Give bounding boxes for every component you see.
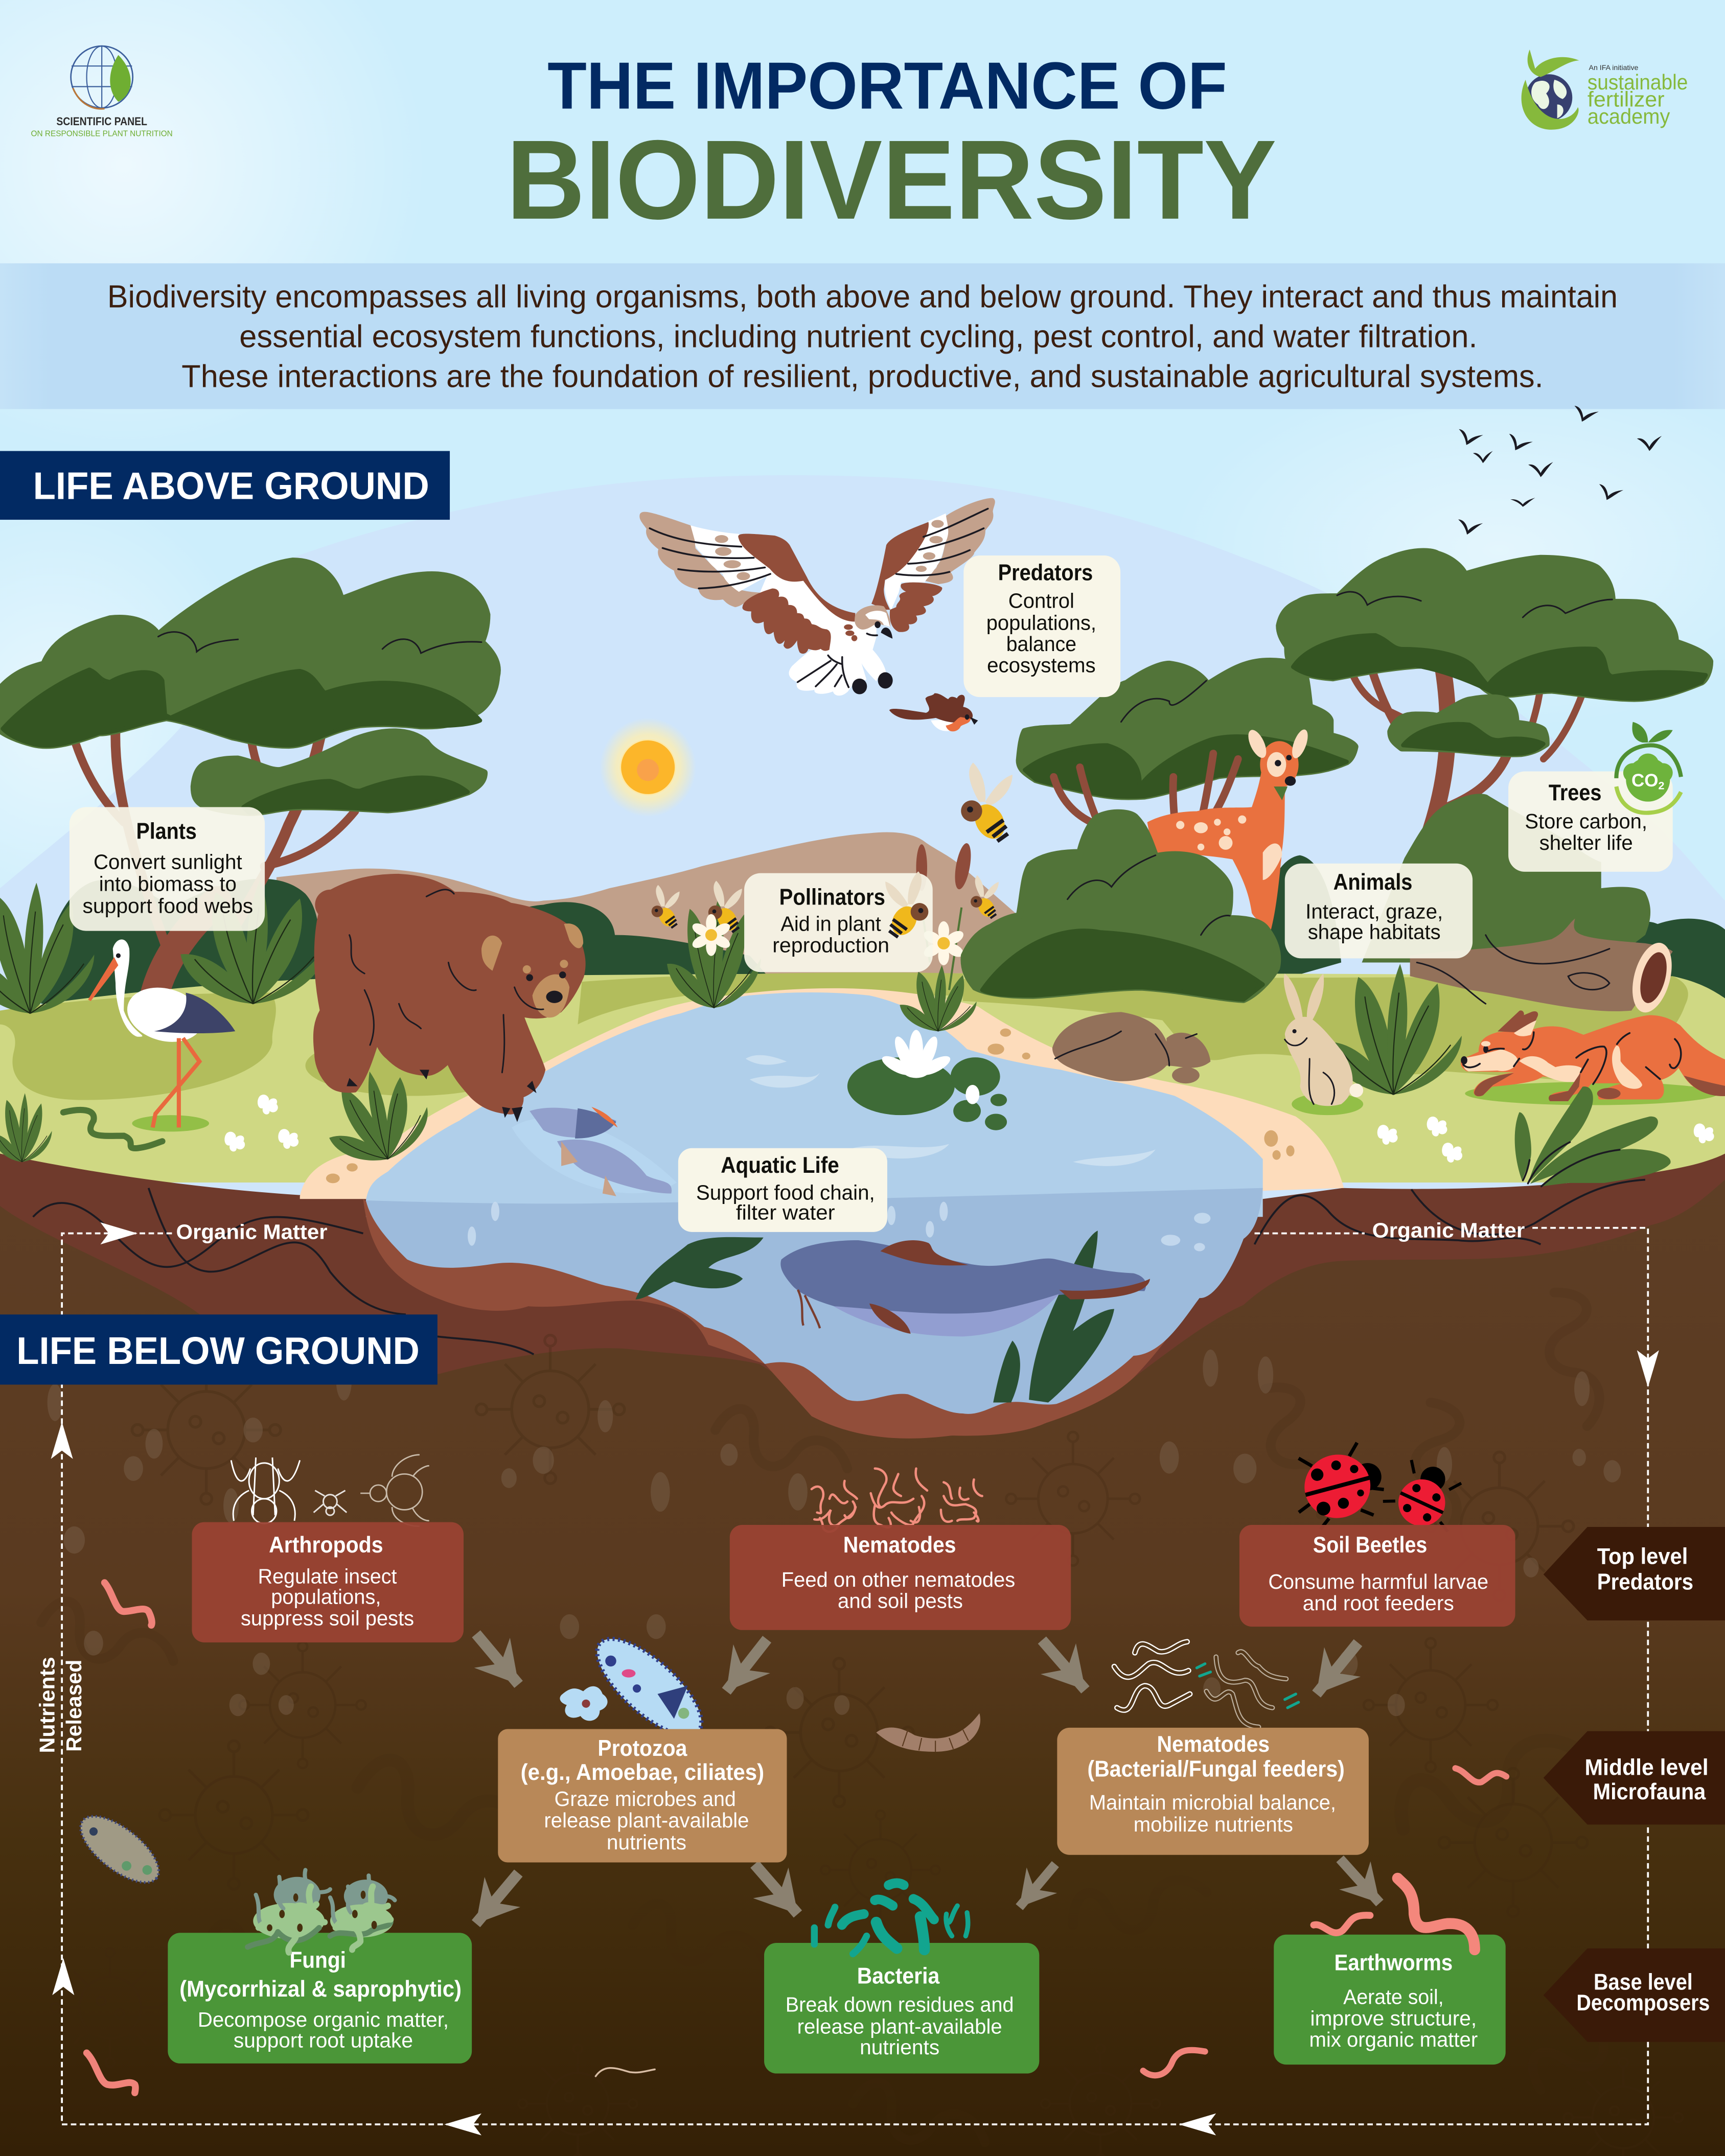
panel: earthworms: Earthworms	[1335, 1951, 1453, 1976]
panel: soil beetles	[1239, 1525, 1515, 1627]
icon: CO2 cycle: CO	[1631, 771, 1659, 791]
card: plants	[70, 807, 265, 931]
panel: arthropods: populations,	[271, 1585, 381, 1609]
loop: dashed nutrient cycle path	[51, 1222, 1659, 2136]
icon: CO2 cycle	[1616, 722, 1681, 813]
hollow log	[1410, 918, 1678, 1017]
card: aquatic life: Aquatic Life	[721, 1153, 839, 1178]
card: pollinators: Aid in plant	[780, 912, 881, 936]
tree: middle back	[1019, 661, 1355, 864]
card: predators: balance	[1006, 632, 1076, 656]
panel: nematodes predators: Feed on other nematodes	[781, 1568, 1015, 1591]
panel: protozoa: Protozoa	[597, 1736, 687, 1761]
bush front	[964, 813, 1278, 1000]
panel: fungi: support root uptake	[234, 2028, 413, 2052]
panel: nematodes feeders: mobilize nutrients	[1134, 1813, 1293, 1836]
deer	[1147, 727, 1311, 930]
sand bank and pond surface	[300, 988, 1344, 1217]
seaweed right	[993, 1231, 1114, 1403]
water lily	[847, 1030, 1007, 1130]
eagle and robin	[639, 498, 995, 731]
rock	[1052, 1012, 1210, 1083]
tag: top level	[1544, 1527, 1725, 1620]
card: plants: into biomass to	[99, 872, 237, 896]
panel: soil beetles: and root feeders	[1303, 1591, 1454, 1615]
aquatic bubbles	[468, 1202, 1210, 1251]
panel: earthworms	[1274, 1935, 1506, 2065]
intro text band: These interactions are the foundation of resilient, productive, and sustainable agricultural systems.	[181, 359, 1544, 394]
rabbit	[1284, 973, 1363, 1106]
bush behind log	[1362, 794, 1650, 962]
card: pollinators: Pollinators	[779, 885, 885, 910]
icon: fungi lichen	[247, 1870, 395, 1953]
logo: scientific panel	[31, 45, 173, 138]
card: trees: Trees	[1549, 780, 1601, 805]
card: animals: Animals	[1333, 870, 1412, 895]
panel: nematodes predators: Nematodes	[843, 1533, 956, 1558]
panel: arthropods	[192, 1522, 464, 1642]
icon: bacteria cluster	[814, 1883, 968, 1954]
card: predators: Predators	[998, 560, 1093, 585]
title: THE IMPORTANCE OF	[547, 49, 1227, 123]
far bushes	[41, 855, 1725, 1017]
catfish	[780, 1240, 1150, 1336]
card: predators	[963, 555, 1120, 697]
intro text band	[0, 263, 1725, 409]
panel: nematodes feeders: Nematodes	[1157, 1732, 1270, 1757]
logo: sustainable fertilizer academy: An IFA initiative	[1589, 63, 1639, 72]
card: plants: Convert sunlight	[94, 850, 242, 874]
panel: nematodes feeders: (Bacterial/Fungal feeders)	[1088, 1756, 1345, 1781]
mountain	[277, 832, 1025, 990]
white ground flowers	[224, 1095, 1714, 1163]
logo: scientific panel: ON RESPONSIBLE PLANT NUTRITION	[31, 129, 173, 138]
soil: deep brown	[0, 1180, 1725, 2156]
heading: life above ground	[0, 451, 450, 520]
card: animals: shape habitats	[1308, 920, 1441, 944]
title	[506, 49, 1277, 243]
card: predators: populations,	[986, 611, 1096, 634]
label: organic matter left: Organic Matter	[176, 1220, 328, 1243]
heading: life above ground: LIFE ABOVE GROUND	[33, 465, 429, 507]
panel: bacteria: nutrients	[860, 2035, 939, 2059]
icon: CO2 cycle: 2	[1659, 779, 1665, 792]
heading: life below ground: LIFE BELOW GROUND	[16, 1329, 420, 1372]
panel: protozoa: (e.g., Amoebae, ciliates)	[521, 1760, 764, 1785]
label: organic matter right: Organic Matter	[1372, 1219, 1525, 1242]
card: aquatic life: filter water	[736, 1201, 835, 1224]
logo: sustainable fertilizer academy: sustainable	[1588, 70, 1688, 94]
card: animals	[1285, 864, 1473, 958]
panel: nematodes feeders: Maintain microbial balance,	[1089, 1791, 1336, 1814]
panel: earthworms: improve structure,	[1310, 2006, 1477, 2030]
tree: left	[0, 561, 497, 997]
soil contour lines	[33, 1180, 1645, 1354]
panel: bacteria	[764, 1943, 1039, 2074]
pond red bank	[363, 1188, 1263, 1439]
panel: nematodes predators	[730, 1525, 1071, 1630]
soil texture	[41, 1282, 1683, 2156]
panel: bacteria: Break down residues and	[786, 1992, 1014, 2016]
panel: fungi: Decompose organic matter,	[198, 2008, 449, 2031]
icon: spiders	[231, 1455, 429, 1526]
panel: earthworms: mix organic matter	[1309, 2028, 1478, 2051]
logo: sustainable fertilizer academy: fertilizer	[1588, 87, 1665, 111]
card: plants: Plants	[136, 819, 197, 844]
panel: arthropods: Regulate insect	[258, 1564, 397, 1588]
label: nutrients released	[35, 1657, 86, 1753]
card: trees: Store carbon,	[1525, 809, 1647, 833]
panel: arthropods: Arthropods	[269, 1533, 383, 1558]
icon: ladybugs	[1285, 1439, 1470, 1539]
snake	[63, 1110, 163, 1148]
tag: base level	[1544, 1949, 1725, 2042]
cattails	[916, 842, 974, 990]
card: animals: Interact, graze,	[1305, 899, 1443, 923]
panel: nematodes feeders	[1057, 1728, 1369, 1855]
icon: microfauna nematodes	[1114, 1642, 1299, 1727]
seaweed left	[635, 1237, 764, 1300]
panel: protozoa: Graze microbes and	[555, 1787, 736, 1811]
panel: fungi: (Mycorrhizal & saprophytic)	[179, 1977, 462, 2002]
bee on pollinators card	[885, 871, 928, 940]
tag: base level: Base level	[1594, 1969, 1693, 1995]
icon: protozoa	[560, 1624, 716, 1751]
tag: middle level	[1544, 1731, 1725, 1825]
tag: top level: Top level	[1597, 1544, 1688, 1569]
panel: fungi	[168, 1933, 472, 2064]
intro text band: Biodiversity encompasses all living organisms, both above and below ground. They interact and thus maintain	[107, 279, 1618, 314]
tag: base level: Decomposers	[1576, 1990, 1710, 2015]
panel: bacteria: Bacteria	[857, 1963, 940, 1988]
title: BIODIVERSITY	[506, 117, 1277, 243]
heading: life below ground	[0, 1314, 438, 1385]
panel: protozoa	[498, 1729, 787, 1863]
panel: bacteria: release plant-available	[797, 2015, 1002, 2038]
card: trees: shelter life	[1539, 831, 1633, 854]
panel: earthworms: Aerate soil,	[1343, 1985, 1444, 2009]
panel: nematodes predators: and soil pests	[838, 1589, 963, 1613]
salmon	[530, 1107, 672, 1196]
intro text band: essential ecosystem functions, including nutrient cycling, pest control, and water filtration.	[239, 319, 1478, 354]
logo: scientific panel: SCIENTIFIC PANEL	[56, 115, 147, 128]
arrows between food-web levels	[458, 1619, 1395, 1939]
icon: grub	[876, 1713, 980, 1752]
plant fans	[0, 880, 1462, 1172]
earthworms	[87, 1583, 1506, 2093]
icon: predator nematodes	[812, 1469, 982, 1532]
panel: soil beetles: Soil Beetles	[1313, 1533, 1427, 1558]
sun	[600, 718, 696, 817]
bear	[315, 876, 584, 1122]
card: predators: ecosystems	[987, 654, 1096, 677]
fox and lower right plant	[1461, 1010, 1725, 1187]
ground above	[0, 972, 1725, 1183]
sky background	[0, 0, 1725, 1375]
label: nutrients released: Nutrients	[35, 1657, 59, 1753]
panel: soil beetles: Consume harmful larvae	[1268, 1570, 1488, 1593]
tag: middle level: Microfauna	[1593, 1779, 1706, 1804]
card: predators: Control	[1008, 589, 1074, 612]
card: aquatic life	[678, 1148, 887, 1232]
card: trees	[1508, 771, 1673, 872]
stork	[88, 939, 235, 1127]
flock of birds	[1455, 403, 1662, 538]
icon: grey protozoa	[70, 1804, 169, 1894]
panel: protozoa: release plant-available	[544, 1809, 749, 1832]
logo: sustainable fertilizer academy: academy	[1588, 104, 1670, 128]
card: pollinators	[744, 873, 933, 972]
sky dome	[0, 475, 1725, 1238]
bees and daisies	[652, 762, 1013, 965]
soil: upper dark band	[0, 1153, 1725, 1389]
tag: middle level: Middle level	[1584, 1755, 1709, 1780]
panel: arthropods: suppress soil pests	[241, 1606, 414, 1630]
card: aquatic life: Support food chain,	[696, 1181, 875, 1204]
pond underwater	[366, 1188, 1263, 1414]
logo: sustainable fertilizer academy	[1522, 50, 1688, 130]
tree: right with canopy	[1279, 551, 1710, 866]
panel: fungi: Fungi	[290, 1948, 346, 1973]
label: nutrients released: Released	[62, 1660, 86, 1752]
card: plants: support food webs	[82, 894, 253, 918]
panel: protozoa: nutrients	[607, 1830, 686, 1854]
card: pollinators: reproduction	[772, 933, 889, 957]
tag: top level: Predators	[1597, 1569, 1693, 1594]
